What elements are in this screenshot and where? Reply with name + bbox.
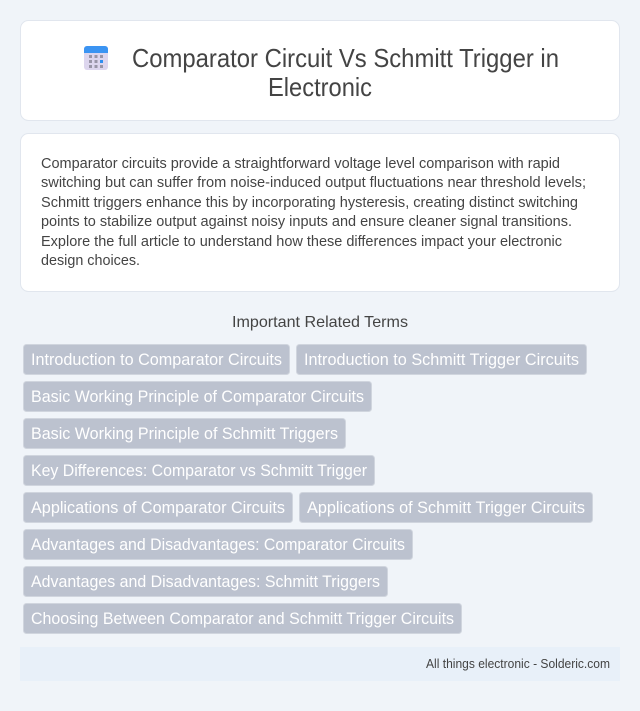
tag — [24, 344, 290, 374]
tag: Applications of Comparator Circuits — [31, 499, 285, 517]
heading: important related terms: Important Related Terms — [232, 314, 408, 331]
tag: Key Differences: Comparator vs Schmitt Trigger — [31, 462, 367, 480]
tag — [296, 344, 586, 374]
panel: description — [20, 134, 620, 292]
title — [132, 43, 559, 102]
tag — [24, 566, 388, 596]
tag — [24, 418, 346, 448]
text block: description paragraph: points to stabilize output against noisy inputs and ensure cleaner signal transitions. — [41, 213, 572, 230]
tag: Basic Working Principle of Schmitt Triggers — [31, 425, 338, 443]
tag: Basic Working Principle of Comparator Circuits — [31, 388, 364, 406]
title: Comparator Circuit Vs Schmitt Trigger in — [132, 43, 559, 73]
panel: related terms tags — [24, 344, 592, 634]
footer: All things electronic - Solderic.com — [426, 657, 610, 671]
tag — [24, 492, 292, 522]
tag: Advantages and Disadvantages: Comparator Circuits — [31, 536, 405, 554]
panel: title card — [20, 20, 620, 120]
text block: description paragraph: Explore the full article to understand how these differences impact your electronic — [41, 233, 562, 250]
text block: description paragraph — [41, 155, 586, 269]
tag — [24, 530, 412, 560]
tag: Choosing Between Comparator and Schmitt Trigger Circuits — [31, 610, 454, 628]
text block: description paragraph: switching but can suffer from noise-induced output fluctuations near threshold levels; — [41, 174, 586, 191]
tag — [24, 382, 372, 412]
tag: Applications of Schmitt Trigger Circuits — [307, 499, 585, 517]
tag: Introduction to Schmitt Trigger Circuits — [304, 351, 579, 369]
title: Electronic — [268, 72, 372, 102]
tag: Introduction to Comparator Circuits — [31, 351, 282, 369]
icon: calendar app — [84, 46, 108, 70]
text block: description paragraph: Schmitt triggers enhance this by incorporating hysteresis, creating distinct switching — [41, 194, 578, 211]
text block: description paragraph: design choices. — [41, 252, 140, 269]
footer — [20, 647, 620, 681]
tag: Advantages and Disadvantages: Schmitt Triggers — [31, 573, 380, 591]
text block: description paragraph: Comparator circuits provide a straightforward voltage level comparison with rapid — [41, 155, 560, 172]
tag — [300, 492, 592, 522]
tag — [24, 604, 462, 634]
tag — [24, 456, 374, 486]
